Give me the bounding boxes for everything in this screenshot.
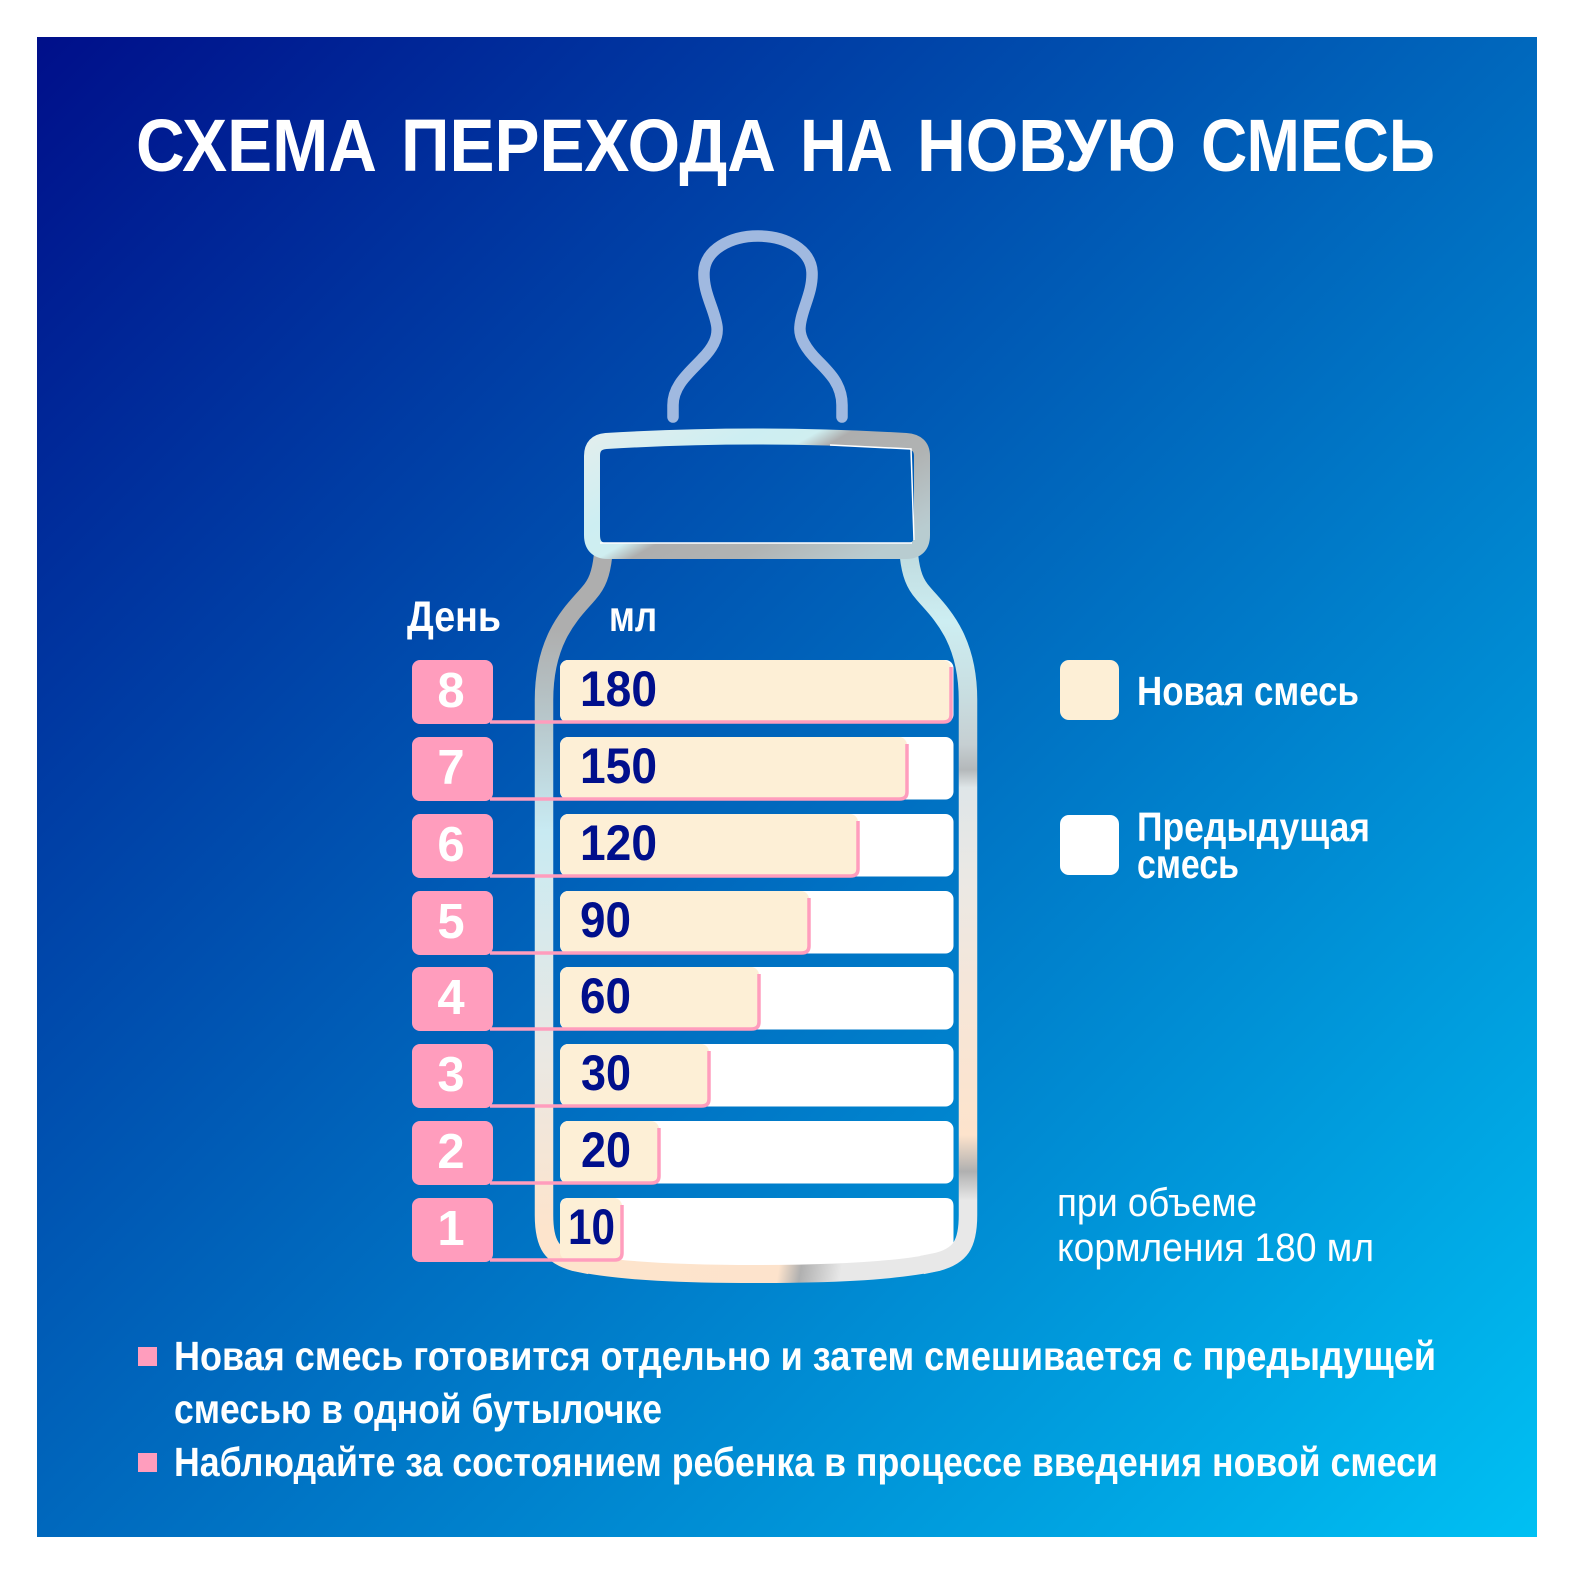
- row: day 5: 5: [437, 895, 465, 949]
- bottle nipple: [673, 236, 842, 417]
- row: day 5: [412, 891, 809, 955]
- row: day 8: [412, 660, 951, 724]
- row: day 8: 180: [580, 661, 657, 717]
- row: day 7: 7: [437, 741, 465, 795]
- title: ПЕРЕХОДА: [401, 104, 776, 187]
- row: day 8: 8: [437, 664, 465, 718]
- note 1 line 1: Новая смесь готовится отдельно и затем смешивается с предыдущей: [174, 1333, 1436, 1379]
- row: day 7: 150: [580, 738, 657, 794]
- bullet marker 2: [138, 1453, 157, 1472]
- cap inner highlight: [600, 445, 914, 543]
- column heading: ml: мл: [609, 593, 657, 641]
- row: day 4: 4: [437, 971, 465, 1025]
- baby bottle outline: [544, 236, 968, 1274]
- column heading: day: День: [407, 593, 501, 641]
- bullet marker 1: [138, 1347, 157, 1366]
- feeding volume note: при объеме: [1057, 1181, 1257, 1225]
- row: day 1: 1: [437, 1202, 465, 1256]
- row: day 1: 10: [568, 1199, 615, 1255]
- legend: previous formula: [1060, 804, 1370, 887]
- note 1 line 2: смесью в одной бутылочке: [174, 1386, 662, 1432]
- title: НОВУЮ: [917, 104, 1176, 187]
- legend: previous formula: Предыдущая: [1137, 804, 1370, 850]
- row: day 3: 3: [437, 1048, 465, 1102]
- bottle neck and body left: [544, 556, 603, 1265]
- row: day 4: [412, 967, 759, 1031]
- legend: new formula: Новая смесь: [1137, 668, 1359, 714]
- row: day 2: 2: [437, 1125, 465, 1179]
- row: day 2: [412, 1121, 659, 1185]
- bottle neck and body right: [909, 556, 968, 1265]
- legend: previous formula: смесь: [1137, 841, 1239, 887]
- legend: new formula: [1060, 660, 1359, 720]
- row: day 6: 6: [437, 818, 465, 872]
- feeding volume note: кормления 180 мл: [1057, 1226, 1374, 1270]
- bullet notes: [138, 1333, 1438, 1485]
- row: day 5: 90: [580, 892, 631, 948]
- row: day 6: [412, 814, 858, 878]
- row: day 6: 120: [580, 815, 657, 871]
- title: СХЕМА: [136, 104, 377, 187]
- title: [136, 104, 1435, 187]
- bottle cap: [592, 436, 922, 551]
- bottle bottom: [575, 1262, 937, 1274]
- row: day 3: [412, 1044, 709, 1108]
- previous formula white bars: [560, 660, 954, 1268]
- title: СМЕСЬ: [1201, 104, 1435, 187]
- row: day 1: [412, 1198, 622, 1262]
- row: day 7: [412, 737, 907, 801]
- row: day 2: 20: [581, 1122, 631, 1178]
- feeding volume note: [1057, 1181, 1374, 1270]
- row: day 3: 30: [581, 1045, 631, 1101]
- row: day 4: 60: [580, 968, 631, 1024]
- title: НА: [800, 104, 893, 187]
